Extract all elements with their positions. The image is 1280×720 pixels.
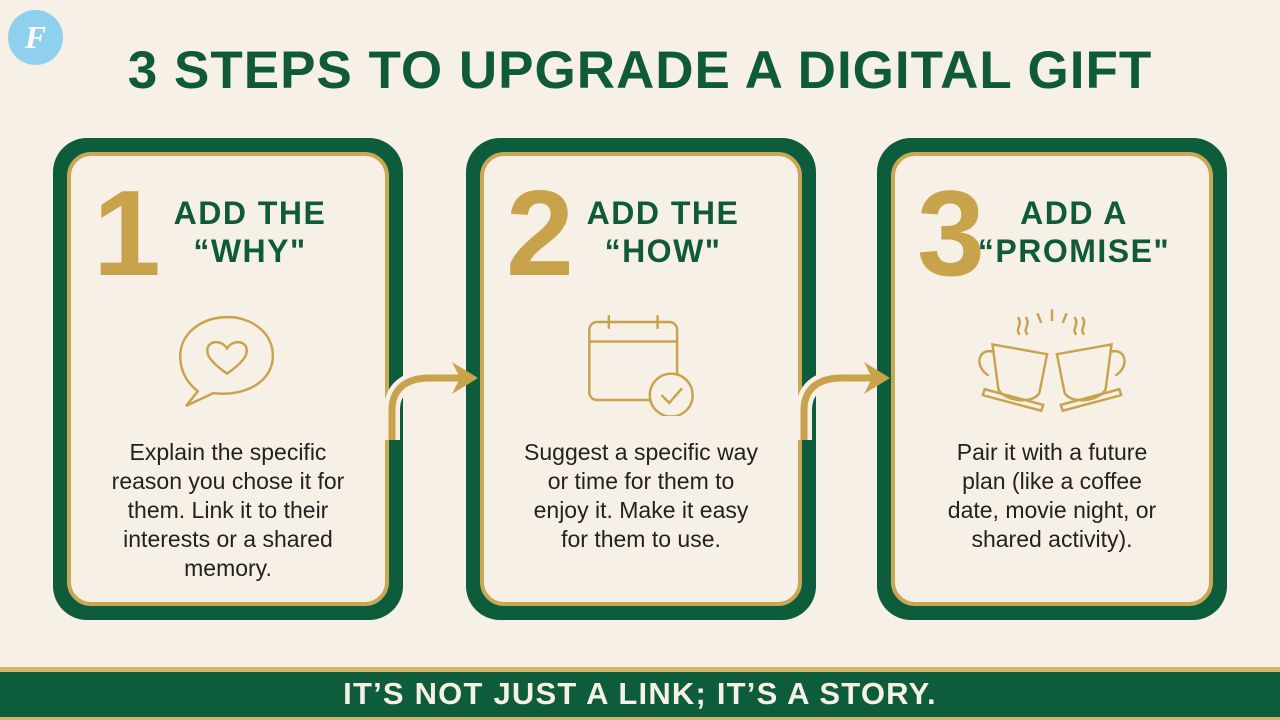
icon: speech bubble heart xyxy=(179,316,274,407)
panel: step 2 xyxy=(466,138,816,620)
heading 1: “WHY" xyxy=(193,233,307,269)
heading 2 xyxy=(587,195,739,269)
body 3: date, movie night, or xyxy=(948,497,1156,523)
footer banner xyxy=(0,667,1280,720)
heading 2: “HOW" xyxy=(605,233,721,269)
logo xyxy=(8,10,63,65)
icon: calendar check xyxy=(588,315,694,416)
body 2: or time for them to xyxy=(548,468,734,494)
heading 1 xyxy=(174,195,326,269)
body 3: Pair it with a future xyxy=(957,439,1147,465)
body 3 xyxy=(948,439,1156,552)
body 2 xyxy=(524,439,758,552)
footer banner: IT’S NOT JUST A LINK; IT’S A STORY. xyxy=(343,676,937,711)
arrow 2 xyxy=(798,362,890,440)
logo: F xyxy=(25,19,46,55)
body 3: shared activity). xyxy=(971,526,1133,552)
body 2: enjoy it. Make it easy xyxy=(534,497,748,523)
arrow 1 xyxy=(385,362,478,440)
body 1: memory. xyxy=(184,555,272,581)
body 2: Suggest a specific way xyxy=(524,439,758,465)
number 3: 3 xyxy=(917,165,985,301)
body 1: Explain the specific xyxy=(130,439,326,465)
heading 3: ADD A xyxy=(1020,195,1128,231)
title: 3 STEPS TO UPGRADE A DIGITAL GIFT xyxy=(128,41,1152,100)
body 3: plan (like a coffee xyxy=(962,468,1142,494)
number 2: 2 xyxy=(506,165,574,301)
body 1: interests or a shared xyxy=(123,526,333,552)
panel: step 1 xyxy=(53,138,403,620)
panel: step 3 xyxy=(877,138,1227,620)
heading 3 xyxy=(978,195,1170,269)
number 1: 1 xyxy=(93,165,161,301)
heading 2: ADD THE xyxy=(587,195,739,231)
body 1: reason you chose it for xyxy=(112,468,344,494)
heading 1: ADD THE xyxy=(174,195,326,231)
heading 3: “PROMISE" xyxy=(978,233,1170,269)
body 1 xyxy=(112,439,344,581)
icon: coffee cups xyxy=(978,309,1126,412)
body 1: them. Link it to their xyxy=(128,497,328,523)
body 2: for them to use. xyxy=(561,526,721,552)
